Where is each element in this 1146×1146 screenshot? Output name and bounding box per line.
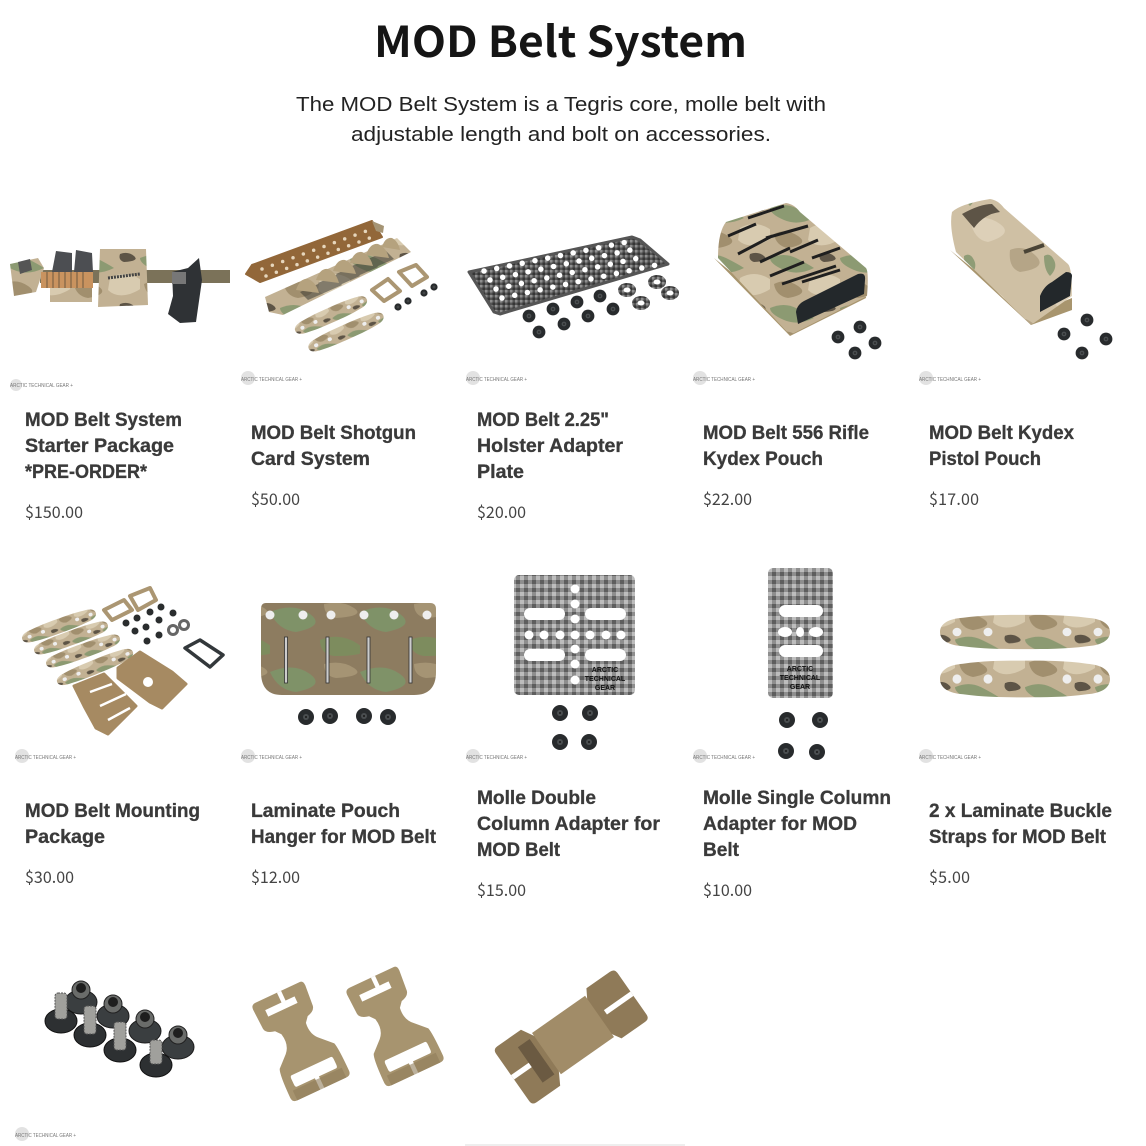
product name: MOD Belt System: [25, 410, 182, 431]
watermark: ARCTIC TECHNICAL GEAR +: [466, 755, 527, 761]
product name: Package: [25, 827, 105, 848]
product name: Card System: [251, 449, 370, 470]
product name: MOD Belt Shotgun: [251, 423, 416, 444]
product: MOD Belt 2.25 Holster Adapter Plate: [466, 237, 679, 523]
watermark: ARCTIC TECHNICAL GEAR +: [693, 755, 755, 761]
icon: single column adapter plate: [768, 568, 833, 760]
icon: assembled buckle: [493, 966, 652, 1105]
icon: holster adapter plate: [469, 237, 679, 338]
product name: MOD Belt: [477, 840, 561, 861]
icon: laminate pouch hanger: [261, 603, 436, 725]
watermark: ARCTIC TECHNICAL GEAR +: [10, 383, 73, 389]
icon: double column adapter plate: ARCTIC: [592, 667, 618, 674]
icon: mounting kit: [20, 588, 223, 734]
product: MOD Belt System Starter Package: [10, 249, 230, 523]
price: $30.00: [25, 864, 74, 888]
product photo: screws: [15, 981, 194, 1141]
watermark: ARCTIC TECHNICAL GEAR +: [466, 377, 527, 383]
product name: MOD Belt Kydex: [929, 423, 1074, 444]
watermark: [241, 371, 302, 385]
product name: *PRE-ORDER*: [25, 462, 148, 483]
product: Laminate Pouch Hanger for MOD Belt: [241, 603, 437, 888]
product name: [929, 801, 1112, 848]
watermark: [466, 371, 527, 385]
product name: [25, 801, 200, 848]
watermark: ARCTIC TECHNICAL GEAR +: [15, 755, 76, 761]
price: $12.00: [251, 864, 300, 888]
watermark: [15, 1127, 76, 1141]
watermark: ARCTIC TECHNICAL GEAR +: [241, 377, 302, 383]
price: $5.00: [929, 864, 970, 888]
product name: Molle Double: [477, 788, 596, 809]
icon: buckle clip right: [342, 964, 445, 1088]
icon: double column adapter plate: GEAR: [595, 685, 615, 692]
product name: Laminate Pouch: [251, 801, 400, 822]
product name: [703, 788, 891, 861]
icon: single column adapter plate: GEAR: [790, 684, 810, 691]
product name: Kydex Pouch: [703, 449, 823, 470]
product name: MOD Belt Mounting: [25, 801, 200, 822]
watermark: [10, 379, 73, 391]
product name: Hanger for MOD Belt: [251, 827, 437, 848]
price: $10.00: [703, 877, 752, 901]
product name: Belt: [703, 840, 740, 861]
title: MOD Belt System: [374, 9, 747, 70]
icon: pistol pouch: [950, 199, 1112, 359]
product: MOD Belt Kydex Pistol Pouch: [919, 199, 1112, 510]
watermark: ARCTIC TECHNICAL GEAR +: [919, 377, 981, 383]
product name: Straps for MOD Belt: [929, 827, 1107, 848]
watermark: [241, 749, 302, 763]
product: MOD Belt Shotgun Card System: [241, 221, 438, 510]
product name: [251, 423, 416, 470]
product name: [703, 423, 869, 470]
product name: Plate: [477, 462, 524, 483]
icon: rifle pouch: [714, 203, 881, 359]
product name: Molle Single Column: [703, 788, 891, 809]
watermark: ARCTIC TECHNICAL GEAR +: [15, 1133, 76, 1139]
icon: single column adapter plate: ARCTIC: [787, 666, 813, 673]
product name: MOD Belt 556 Rifle: [703, 423, 869, 444]
price: $17.00: [929, 486, 979, 510]
product name: 2 x Laminate Buckle: [929, 801, 1112, 822]
product: Molle Double Column Adapter: [466, 575, 661, 901]
icon: single column adapter plate: TECHNICAL: [780, 675, 821, 682]
price: $15.00: [477, 877, 526, 901]
bottom edge sliver: [465, 1144, 685, 1146]
product name: Holster Adapter: [477, 436, 624, 457]
icon: buckle clip left: [248, 979, 351, 1103]
price: $150.00: [25, 499, 83, 523]
product photo: buckle halves: [248, 964, 445, 1103]
product: MOD Belt 556 Rifle Kydex Pouch: [693, 203, 881, 510]
icon: shotgun card: [246, 221, 438, 356]
icon: double column adapter plate: [514, 575, 635, 750]
icon: screws and nuts: [45, 981, 194, 1077]
icon: double column adapter plate: TECHNICAL: [585, 676, 626, 683]
product: Laminate Buckle Straps: [919, 615, 1112, 888]
watermark: ARCTIC TECHNICAL GEAR +: [693, 377, 755, 383]
subtitle: The MOD Belt System is a Tegris core, molle belt with: [296, 93, 826, 116]
product name: [929, 423, 1074, 470]
subtitle: adjustable length and bolt on accessories.: [351, 123, 771, 146]
product name: [25, 410, 182, 483]
subtitle: [296, 93, 826, 146]
product name: Pistol Pouch: [929, 449, 1041, 470]
product: MOD Belt Mounting Package: [15, 588, 223, 888]
product name: MOD Belt 2.25": [477, 410, 609, 431]
price: $22.00: [703, 486, 752, 510]
watermark: [693, 749, 755, 763]
watermark: [15, 749, 76, 763]
icon: belt with pouches: [10, 249, 230, 323]
product name: [477, 788, 661, 861]
product name: [477, 410, 624, 483]
watermark: ARCTIC TECHNICAL GEAR +: [919, 755, 981, 761]
price: $20.00: [477, 499, 526, 523]
product name: Column Adapter for: [477, 814, 661, 835]
product: Molle Single Column Adapter: [693, 568, 891, 901]
product name: [251, 801, 437, 848]
watermark: [693, 371, 755, 385]
product name: Starter Package: [25, 436, 174, 457]
watermark: [919, 749, 981, 763]
price: $50.00: [251, 486, 300, 510]
icon: buckle straps: [940, 615, 1110, 697]
product name: Adapter for MOD: [703, 814, 857, 835]
watermark: [466, 749, 527, 763]
watermark: ARCTIC TECHNICAL GEAR +: [241, 755, 302, 761]
watermark: [919, 371, 981, 385]
